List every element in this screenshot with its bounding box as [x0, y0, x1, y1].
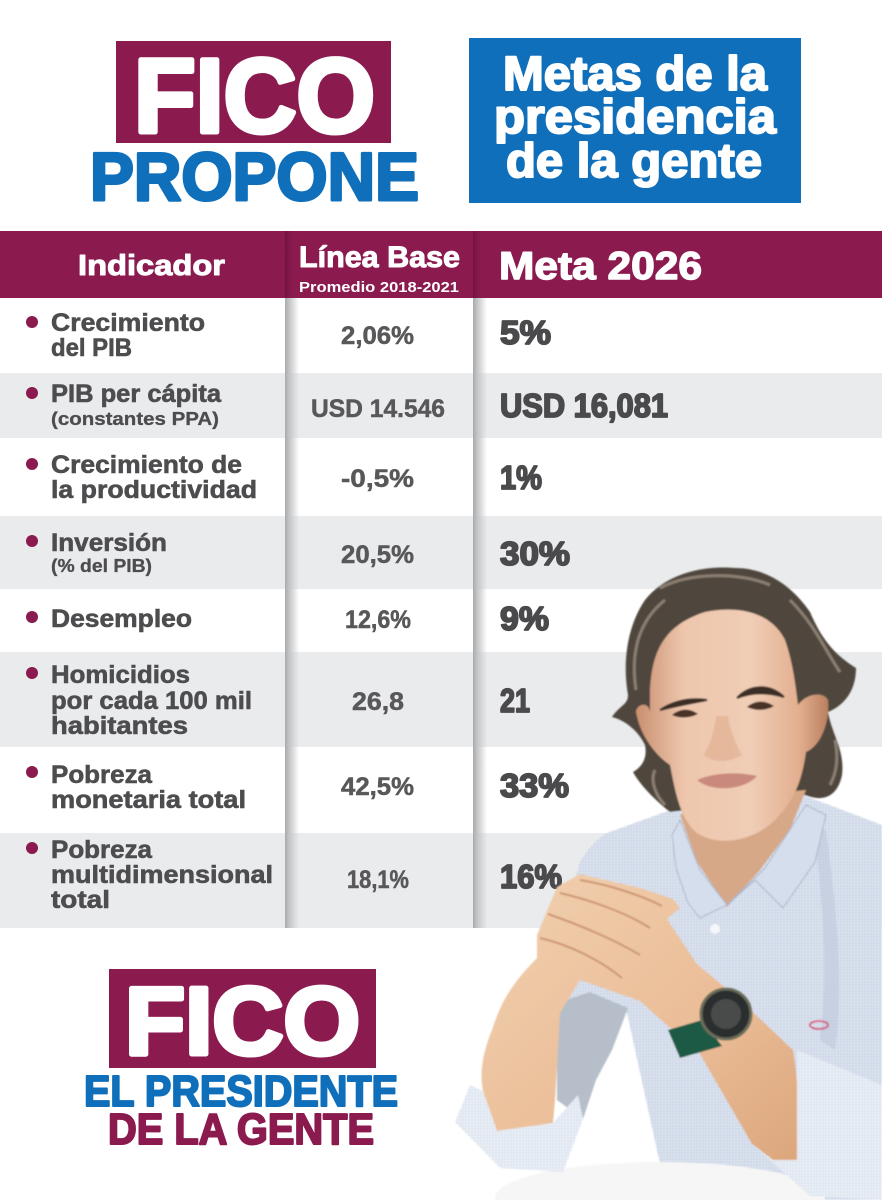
row: Crecimiento del PIB: del PIB: [51, 334, 132, 362]
shirt body: [540, 795, 882, 1200]
row: Homicidios: 21: [500, 682, 530, 719]
row: PIB per cápita: [26, 380, 668, 429]
row: Crecimiento del PIB: 5%: [500, 314, 551, 351]
row: Homicidios: por cada 100 mil: [51, 687, 252, 715]
neck: [680, 790, 806, 907]
hair: [612, 567, 856, 812]
row: PIB per cápita: PIB per cápita: [51, 380, 222, 408]
left cuff: [455, 1085, 583, 1172]
row: Crecimiento de la productividad: Crecimiento de: [51, 451, 242, 479]
title panel: Metas de la presidencia de la gente: Metas de la: [503, 48, 767, 101]
row: Crecimiento del PIB: Crecimiento: [51, 309, 205, 337]
row: Homicidios: 26,8: [352, 688, 404, 716]
row: Pobreza multidimensional total: 16%: [500, 858, 562, 895]
row: Homicidios: habitantes: [51, 712, 188, 740]
table header row: [0, 231, 882, 298]
shirt button: [710, 924, 720, 934]
FICO maroon badge, bottom: FICO: [125, 968, 360, 1075]
row: Inversión: [26, 529, 570, 576]
title panel: Metas de la presidencia de la gente: [469, 38, 801, 203]
FICO maroon badge: FICO: [134, 38, 375, 155]
table header row: Promedio 2018-2021: [299, 279, 459, 296]
row: Desempleo: 9%: [500, 600, 549, 637]
row: Pobreza multidimensional total: [26, 836, 562, 914]
title panel: Metas de la presidencia de la gente: presidencia: [494, 91, 776, 144]
bicycle logo on shirt: [810, 1021, 828, 1029]
table header row: Línea Base: [299, 241, 460, 274]
eyes: [672, 702, 774, 718]
left forearm and hands: [482, 874, 798, 1160]
row: Crecimiento del PIB: 2,06%: [341, 322, 414, 350]
logo: Fico propone: [90, 38, 419, 215]
row: PIB per cápita: (constantes PPA): [51, 409, 219, 429]
logo: Fico el presidente de la gente: [84, 968, 398, 1154]
shirt shadow sleeve: [557, 992, 628, 1119]
row: Inversión: 20,5%: [341, 541, 414, 569]
collar: [672, 805, 826, 918]
right cuff: [752, 1050, 882, 1200]
row: Inversión: Inversión: [51, 529, 167, 557]
row: Inversión: 30%: [500, 535, 570, 572]
portrait: candidate with clasped hands: [455, 567, 882, 1200]
row: PIB per cápita: USD 16,081: [500, 387, 668, 424]
row: PIB per cápita: USD 14.546: [311, 395, 445, 423]
row: Pobreza multidimensional total: 18,1%: [347, 866, 409, 894]
mouth: [697, 773, 757, 788]
row: Pobreza monetaria total: 33%: [500, 767, 569, 804]
alternating row bands: [0, 298, 882, 928]
row: Pobreza monetaria total: 42,5%: [341, 773, 414, 801]
row: Crecimiento del PIB: [26, 309, 551, 362]
row: Crecimiento de la productividad: 1%: [500, 459, 542, 496]
row: Pobreza monetaria total: monetaria total: [51, 786, 246, 814]
row: Crecimiento de la productividad: la productividad: [51, 476, 257, 504]
row: Desempleo: 12,6%: [345, 606, 411, 634]
row: Pobreza monetaria total: Pobreza: [51, 761, 153, 789]
finger lines: [540, 880, 662, 978]
watch: [668, 989, 751, 1058]
nose: [704, 716, 742, 761]
row: Pobreza monetaria total: [26, 761, 569, 814]
row: Inversión: (% del PIB): [51, 556, 152, 576]
face: [636, 610, 828, 841]
row: Desempleo: [26, 600, 549, 637]
row: Homicidios: [26, 661, 530, 740]
PROPONE wordmark: PROPONE: [90, 139, 419, 215]
row: Pobreza multidimensional total: total: [51, 886, 110, 914]
row: Pobreza multidimensional total: multidimensional: [51, 861, 273, 889]
table of indicators: [0, 231, 882, 928]
eyebrows: [660, 687, 784, 710]
row: Desempleo: Desempleo: [51, 605, 192, 633]
table header row: Meta 2026: [499, 245, 702, 288]
slogan line two: DE LA GENTE: [108, 1105, 374, 1154]
row: Homicidios: Homicidios: [51, 661, 190, 689]
table header row: Indicador: [78, 250, 225, 282]
hair highlights: [634, 576, 840, 805]
row: Crecimiento de la productividad: [26, 451, 542, 504]
table edge: [495, 1162, 825, 1200]
row: Pobreza multidimensional total: Pobreza: [51, 836, 153, 864]
title panel: Metas de la presidencia de la gente: de la gente: [506, 135, 762, 188]
shirt shadow fold on torso: [815, 830, 839, 1050]
slogan line one: EL PRESIDENTE: [84, 1067, 398, 1116]
row: Crecimiento de la productividad: -0,5%: [341, 465, 414, 493]
